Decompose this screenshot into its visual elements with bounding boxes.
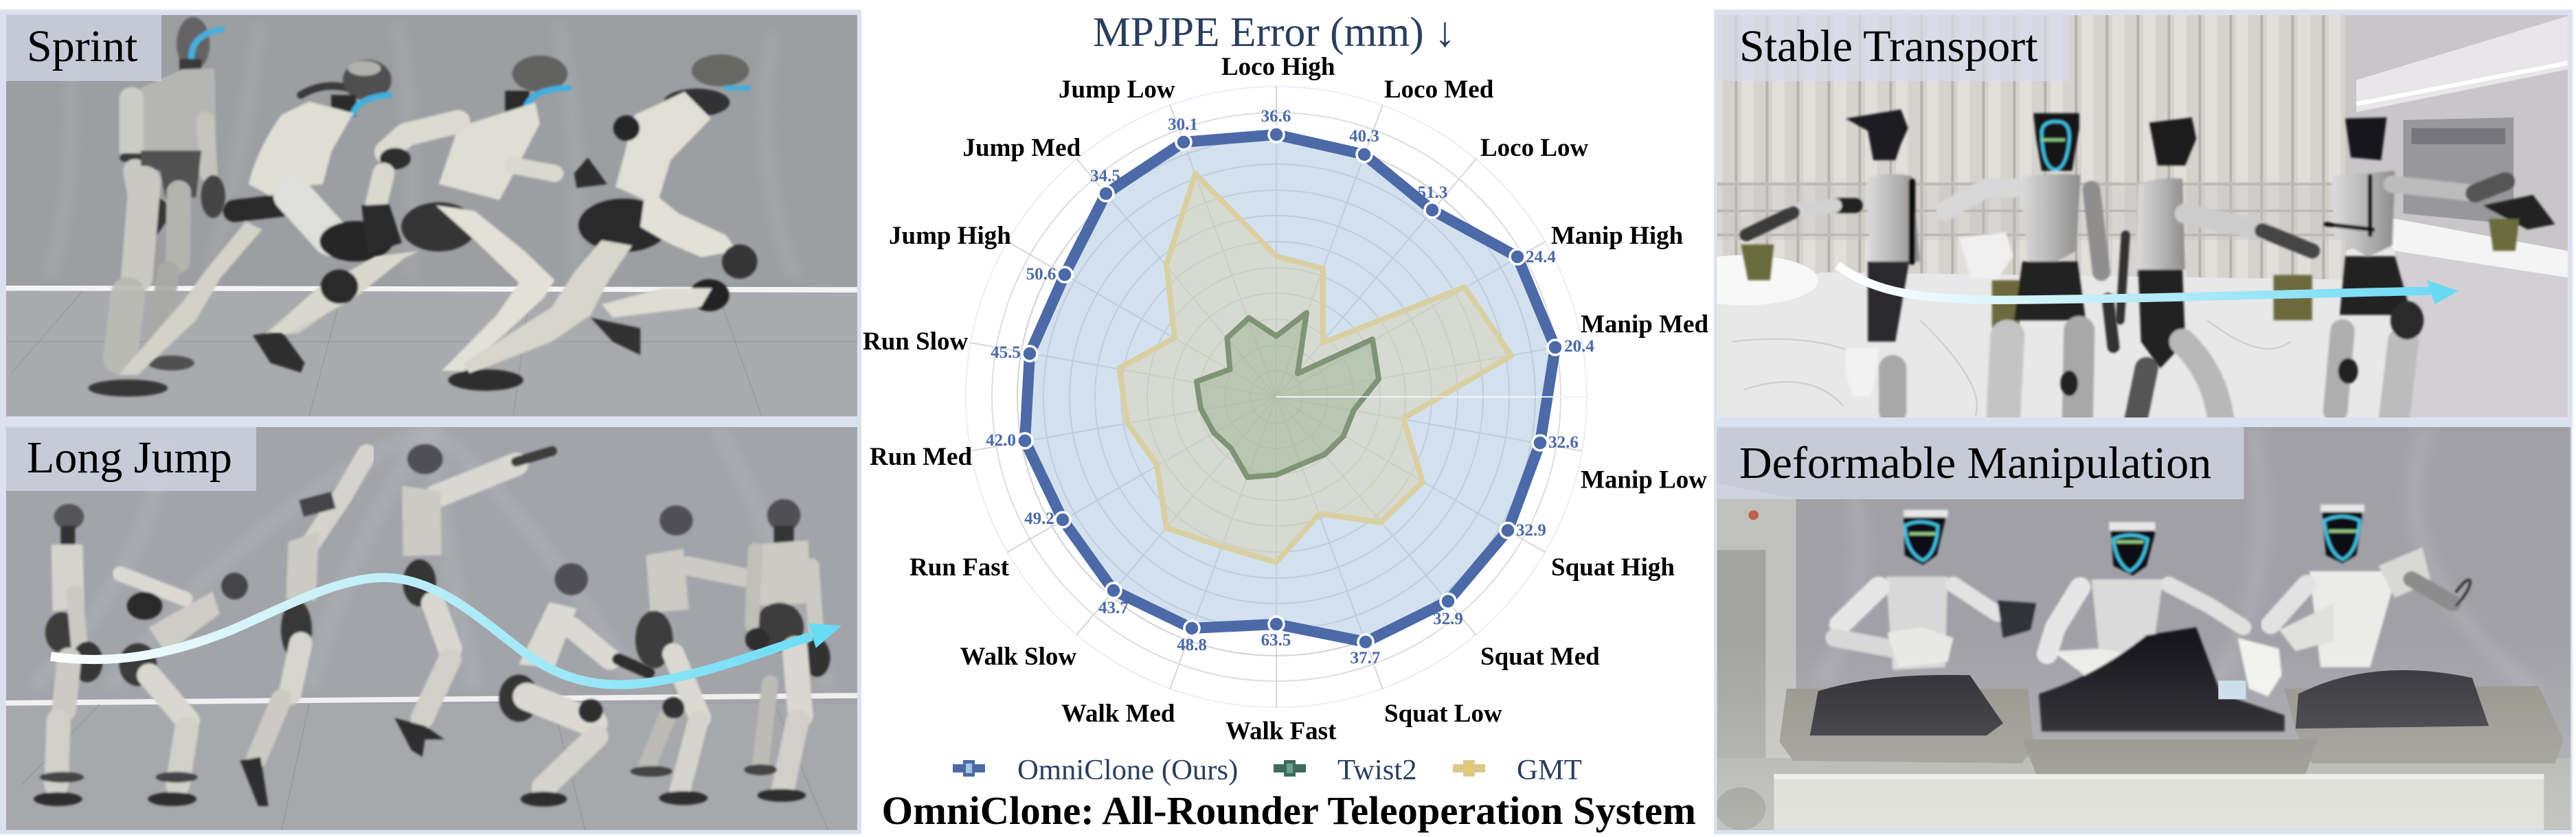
data values: 45.5	[991, 343, 1021, 362]
robot 6	[631, 505, 745, 805]
robot 3 running	[271, 56, 607, 391]
radar chart	[863, 9, 1708, 786]
data values	[986, 107, 1594, 667]
panel: Long Jump	[6, 427, 857, 833]
label: Deformable Manipulation: Deformable Manipulation	[1739, 438, 2211, 488]
axis labels: Squat Low	[1384, 700, 1502, 728]
centre clothes	[2039, 627, 2285, 731]
robot left	[1835, 509, 2036, 670]
robot 2 crouching forward	[120, 573, 248, 806]
data values: 51.3	[1418, 183, 1447, 202]
rail	[1774, 779, 2544, 830]
data values: 42.0	[986, 431, 1016, 450]
label: Deformable Manipulation	[1717, 427, 2244, 499]
data values: 43.7	[1098, 599, 1129, 617]
robot 1 standing	[34, 504, 102, 806]
axis labels: Run Fast	[909, 553, 1010, 582]
data values: 40.3	[1349, 127, 1379, 146]
data values: 36.6	[1261, 107, 1291, 126]
axis labels: Run Med	[870, 443, 972, 471]
robot right	[2271, 505, 2470, 667]
data values: 32.9	[1433, 610, 1463, 628]
robot 1 standing	[89, 17, 225, 397]
axis labels: Manip High	[1551, 222, 1684, 250]
label: Stable Transport: Stable Transport	[1739, 21, 2038, 71]
arrow: transport path	[1838, 265, 2459, 304]
panel frames: left column	[0, 10, 861, 834]
label: Sprint	[6, 15, 161, 81]
tray right	[2285, 686, 2564, 764]
legend: Twist2	[1337, 754, 1417, 786]
axis labels: Squat Med	[1480, 643, 1600, 671]
label: Sprint: Sprint	[27, 21, 137, 71]
axis labels: Jump High	[889, 222, 1011, 250]
main title: OmniClone: All-Rounder Teleoperation System	[882, 788, 1696, 833]
series: GMT	[1120, 174, 1511, 562]
radar grid	[966, 86, 1587, 708]
robot 7 standing	[744, 499, 831, 802]
robot 4 running	[464, 54, 757, 374]
data values: 49.2	[1024, 509, 1054, 528]
data values: 37.7	[1351, 649, 1380, 667]
robot 4 jumping at apex	[395, 444, 552, 757]
arrow: jump trajectory	[51, 577, 841, 685]
axis labels: Walk Med	[1061, 700, 1175, 728]
axis labels: Jump Low	[1059, 76, 1175, 104]
axis labels: Loco High	[1221, 53, 1335, 81]
robot C	[2120, 117, 2312, 422]
robot A	[1741, 109, 1920, 411]
panel: Sprint	[6, 15, 857, 419]
data values: 32.6	[1548, 433, 1579, 452]
legend: OmniClone (Ours)	[1017, 754, 1238, 786]
axis labels: Squat High	[1551, 553, 1675, 582]
legend	[953, 754, 1582, 786]
robot 3 jumping up	[240, 454, 367, 806]
data values: 20.4	[1564, 337, 1594, 356]
label: Long Jump: Long Jump	[27, 433, 232, 483]
panel: Stable Transport	[1669, 15, 2568, 422]
axis labels: Loco Med	[1384, 76, 1494, 104]
white horizontal axis	[1276, 396, 1587, 398]
robot B	[1945, 113, 2114, 422]
data values: 50.6	[1026, 265, 1056, 284]
robot 5 squatting	[499, 563, 648, 807]
series: OmniClone (Ours)	[1017, 127, 1563, 650]
panel: Deformable Manipulation	[1716, 427, 2571, 830]
axis labels: Run Slow	[863, 328, 968, 356]
axis labels: Loco Low	[1480, 134, 1589, 162]
series: Twist2	[1197, 313, 1379, 477]
robot centre	[2039, 522, 2285, 731]
panel frames: right column	[1714, 10, 2573, 834]
axis labels: Jump Med	[963, 134, 1081, 162]
label: Long Jump	[6, 427, 256, 491]
legend: GMT	[1517, 754, 1582, 786]
robot D	[2326, 117, 2555, 422]
axis labels: Walk Slow	[960, 643, 1076, 671]
data values: 34.5	[1090, 167, 1120, 185]
data values: 32.9	[1516, 521, 1546, 540]
chart title: MPJPE Error (mm) ↓	[1093, 9, 1456, 56]
data values: 30.1	[1168, 115, 1198, 134]
white table	[1717, 255, 1818, 305]
clothes right	[2296, 670, 2489, 729]
robot 2 running	[119, 60, 392, 375]
axis labels	[863, 53, 1708, 746]
data values: 63.5	[1261, 631, 1291, 650]
data values: 24.4	[1526, 248, 1556, 266]
label: Stable Transport	[1717, 15, 2069, 81]
axis labels: Manip Low	[1581, 466, 1707, 494]
axis labels: Manip Med	[1581, 310, 1708, 339]
clothes left	[1810, 675, 2003, 735]
data values: 48.8	[1177, 636, 1207, 654]
tray left	[1779, 689, 2033, 764]
axis labels: Walk Fast	[1225, 717, 1337, 746]
tray centre	[2022, 739, 2318, 774]
